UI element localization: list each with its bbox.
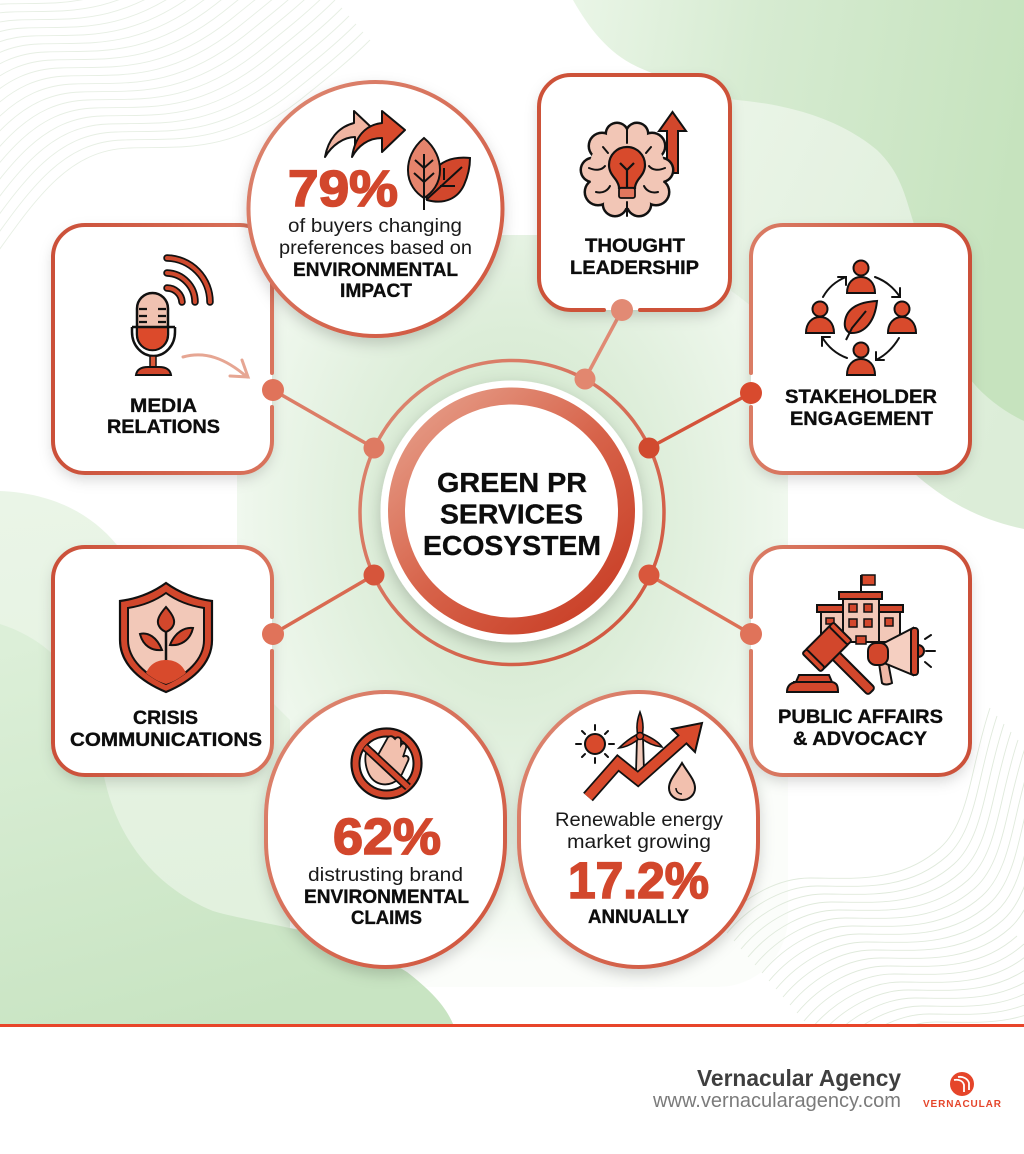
connector lines	[273, 310, 751, 634]
logo: VERNACULAR	[923, 1099, 1002, 1110]
stat description: Renewable energy	[555, 810, 724, 831]
hub title: SERVICES	[440, 498, 583, 530]
panel: central hub	[360, 360, 664, 664]
label: COMMUNICATIONS	[70, 729, 262, 751]
icon: brain with bulb	[580, 122, 674, 218]
panel: stakeholder engagement	[751, 225, 970, 473]
panel: thought leadership	[539, 75, 730, 310]
stat description	[304, 865, 469, 929]
label: RELATIONS	[107, 416, 220, 438]
panel: 17.2% stat	[519, 692, 758, 967]
stat description: ENVIRONMENTAL	[293, 260, 458, 281]
stat suffix: ANNUALLY	[588, 907, 689, 928]
panel: 62% stat	[266, 692, 505, 967]
stat description	[555, 810, 724, 853]
stat description: of buyers changing	[288, 216, 462, 237]
stat description	[279, 216, 472, 302]
stat value: 79%	[288, 160, 398, 217]
panel: public affairs	[751, 547, 970, 775]
icon: building, gavel and megaphone	[787, 575, 935, 707]
panel: 79% stat	[248, 82, 502, 336]
logo	[923, 1072, 1002, 1110]
icon: rising arrow	[659, 112, 686, 173]
icon: double arrows	[325, 111, 405, 157]
hub white ring	[380, 380, 642, 642]
hub title: GREEN PR	[437, 467, 587, 498]
orbit nodes	[364, 368, 660, 586]
label	[778, 706, 943, 750]
hub title: ECOSYSTEM	[423, 530, 601, 561]
stat description: ENVIRONMENTAL	[304, 887, 469, 908]
label	[107, 395, 220, 438]
label	[570, 235, 699, 279]
footer	[0, 1024, 1024, 1154]
label: MEDIA	[130, 395, 197, 417]
agency url: www.vernacularagency.com	[652, 1090, 901, 1112]
stat value: 62%	[333, 808, 441, 865]
stat value: 17.2%	[568, 852, 709, 909]
panel: crisis communications	[53, 547, 272, 775]
stat description: market growing	[567, 832, 711, 853]
stat description: distrusting brand	[308, 865, 463, 886]
label: & ADVOCACY	[793, 728, 927, 750]
panel: media relations	[53, 225, 272, 473]
hub red ring	[396, 396, 626, 626]
icon: shield with plant	[120, 583, 212, 692]
label	[70, 707, 262, 751]
icon: microphone	[132, 258, 210, 375]
label: CRISIS	[133, 707, 198, 729]
stat description: IMPACT	[340, 281, 412, 302]
outer orbit ring	[360, 360, 664, 664]
label: ENGAGEMENT	[790, 408, 933, 430]
label: THOUGHT	[585, 235, 685, 257]
label	[785, 386, 937, 430]
label: LEADERSHIP	[570, 257, 699, 279]
label: STAKEHOLDER	[785, 386, 937, 408]
icon: people circle with leaf	[806, 260, 916, 375]
stat description: CLAIMS	[351, 908, 422, 929]
agency name: Vernacular Agency	[697, 1065, 901, 1091]
label: PUBLIC AFFAIRS	[778, 706, 943, 728]
icon: leaves	[408, 138, 470, 210]
card nodes	[262, 299, 762, 645]
stat description: preferences based on	[279, 238, 472, 259]
icon: sun, turbine, growth arrow and drop	[576, 712, 702, 800]
hub title	[423, 467, 601, 561]
icon: no hand	[352, 728, 422, 798]
icon: curved arrow	[183, 355, 248, 377]
